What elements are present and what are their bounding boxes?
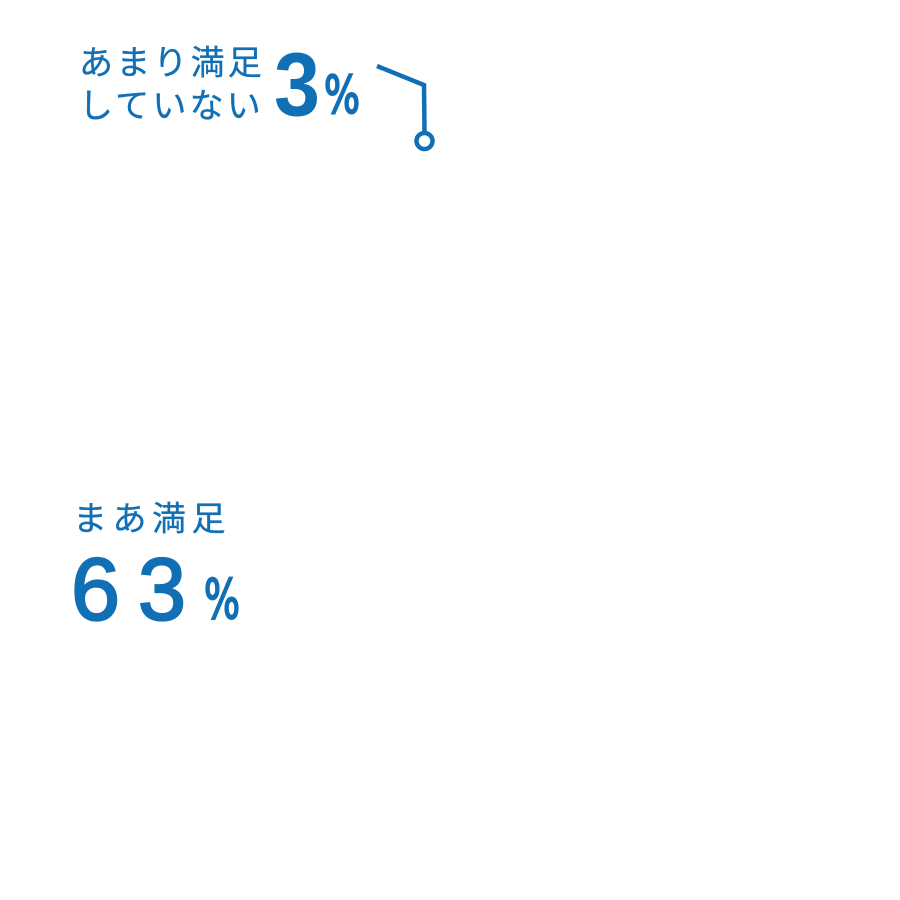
leader line with circle marker: [377, 66, 432, 149]
value: 3%: %: [324, 66, 360, 126]
callout: somewhat satisfied 63%: [71, 500, 240, 638]
value: 3%: [274, 36, 360, 136]
value: 63%: 3: [138, 540, 186, 638]
label: not very satisfied: あまり満足: [79, 44, 265, 82]
label: somewhat satisfied: まあ満足: [73, 500, 231, 538]
label: not very satisfied: していない: [79, 88, 264, 126]
callout: not very satisfied 3%: [79, 36, 432, 149]
value: 63%: 6: [71, 540, 120, 638]
value: 63%: %: [204, 568, 240, 631]
value: 3%: 3: [274, 36, 320, 136]
value: 63%: [71, 540, 240, 638]
label: not very satisfied: [79, 44, 265, 126]
